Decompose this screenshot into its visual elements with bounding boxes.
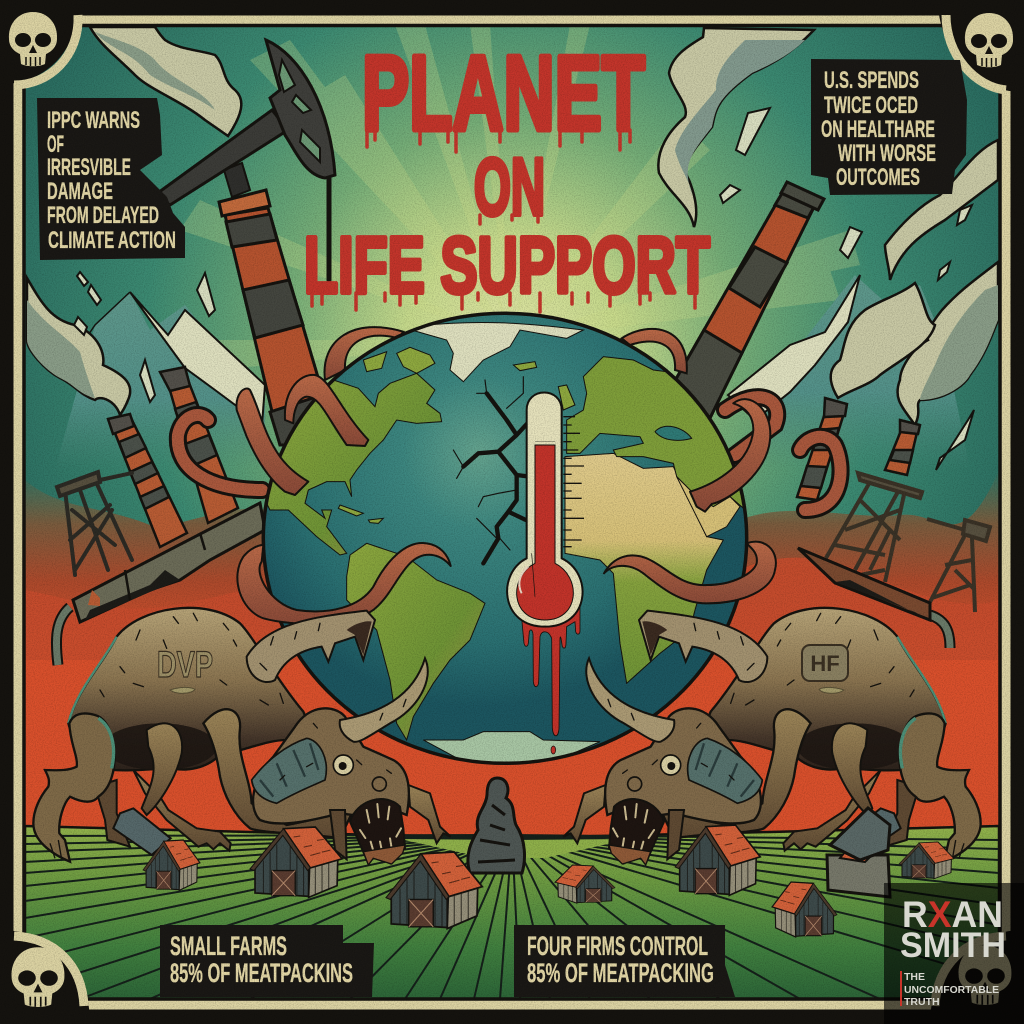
ocean sphere <box>263 313 747 763</box>
left monster <box>33 608 451 865</box>
large right chimney <box>664 182 824 420</box>
callout: small farms: SMALL FARMS <box>170 931 287 961</box>
right small chimney two <box>885 420 920 475</box>
logo block <box>884 883 1024 1024</box>
lower left <box>237 543 451 624</box>
title blood drips <box>312 130 695 312</box>
red field <box>25 630 999 835</box>
callout: ippc warning: OF <box>47 131 64 158</box>
callout: ippc warning: DAMAGE <box>47 178 113 205</box>
callout: ippc warning: CLIMATE ACTION <box>48 227 176 254</box>
right monster <box>563 608 981 865</box>
greenland <box>400 322 583 382</box>
callout: four firms <box>514 925 735 997</box>
crack <box>453 377 543 563</box>
lower right <box>604 542 776 603</box>
callout: small farms: 85% OF MEATPACKINS <box>170 958 353 988</box>
back tentacles <box>178 327 841 510</box>
callout: us healthcare <box>811 59 967 195</box>
title line planet: PLANET <box>362 34 645 152</box>
smoke right lower <box>898 262 998 425</box>
skull bottom left <box>12 947 64 1007</box>
smoke left <box>27 278 130 415</box>
red cloud shapes <box>25 558 999 660</box>
mountains left <box>62 291 266 448</box>
skull top right <box>965 13 1013 67</box>
smoke top left <box>90 27 241 136</box>
logo block: UNCOMFORTABLE <box>904 984 999 996</box>
scale ticks <box>563 417 584 547</box>
smoke top right <box>658 28 814 227</box>
large left chimney <box>217 188 320 446</box>
hook left <box>285 375 368 446</box>
left pipeline <box>56 503 265 665</box>
eurasia <box>567 357 753 517</box>
monster logo right <box>802 645 848 681</box>
logo block: TRUTH <box>904 996 940 1008</box>
barn 4 <box>555 865 615 903</box>
britain <box>558 385 575 410</box>
right small chimney one <box>797 398 847 500</box>
right hook <box>690 399 770 512</box>
logo block: SMITH <box>900 926 1006 965</box>
globe <box>263 313 753 763</box>
callout: us healthcare: ON HEALTHARE <box>821 116 935 143</box>
long left <box>236 389 308 495</box>
barn 1 <box>143 840 200 890</box>
thermometer <box>507 392 584 627</box>
right derrick large <box>826 473 922 582</box>
green radial sky <box>26 27 998 525</box>
monster logo right: HF <box>810 651 840 676</box>
globe outline <box>263 313 747 763</box>
barn 3 <box>386 852 482 929</box>
continents <box>263 322 753 763</box>
title line life support: LIFE SUPPORT <box>304 220 710 310</box>
arabia <box>677 477 740 537</box>
callout: ippc warning: IRRESVIBLE <box>47 154 131 181</box>
title line on: ON <box>474 142 545 232</box>
south america <box>347 543 485 740</box>
barns <box>143 808 954 937</box>
brown red haze <box>26 476 998 630</box>
logo block: RXAN <box>902 894 1003 935</box>
skull top left <box>9 12 57 66</box>
caribbean islands <box>338 505 383 523</box>
arctic islands <box>397 347 435 373</box>
left derrick <box>57 472 132 575</box>
skull bottom right <box>959 945 1011 1005</box>
north america <box>263 373 442 555</box>
africa and middle east <box>565 453 723 683</box>
ice shards <box>74 108 974 470</box>
callout: us healthcare: OUTCOMES <box>836 164 920 191</box>
callout: ippc warning: IPPC WARNS <box>47 107 140 134</box>
callout: us healthcare: WITH WORSE <box>838 140 936 167</box>
title <box>304 34 710 312</box>
antarctica <box>423 732 600 763</box>
callout: us healthcare: TWICE OCED <box>824 92 918 119</box>
smoke right middle <box>831 283 935 398</box>
callout: ippc warning: FROM DELAYED <box>47 202 159 229</box>
barn 8 <box>899 842 954 879</box>
sky rays <box>184 27 860 367</box>
callout: ippc warning <box>37 98 185 260</box>
barn 5 <box>675 825 760 895</box>
ground <box>25 826 999 999</box>
black and caspian seas <box>655 426 692 440</box>
blood drips <box>522 607 580 754</box>
crushed grey building <box>827 808 890 897</box>
right derrick small <box>927 519 990 612</box>
callout: small farms <box>160 925 374 997</box>
front tentacles <box>236 375 776 624</box>
barn 2 <box>250 827 342 897</box>
callout: us healthcare: U.S. SPENDS <box>824 67 919 94</box>
left small chimney two <box>160 367 238 523</box>
right pipeline <box>798 548 950 648</box>
monster logo left: DVP <box>157 644 213 685</box>
rock monolith <box>468 778 524 873</box>
mountains right <box>726 274 965 446</box>
smoke right upper <box>885 140 998 280</box>
callout: four firms: 85% OF MEATPACKING <box>527 958 714 988</box>
pump jack <box>155 40 335 280</box>
barn 6 <box>772 882 837 937</box>
logo block: THE <box>904 971 925 983</box>
callout: four firms: FOUR FIRMS CONTROL <box>527 931 708 961</box>
left small chimney one <box>108 414 187 547</box>
